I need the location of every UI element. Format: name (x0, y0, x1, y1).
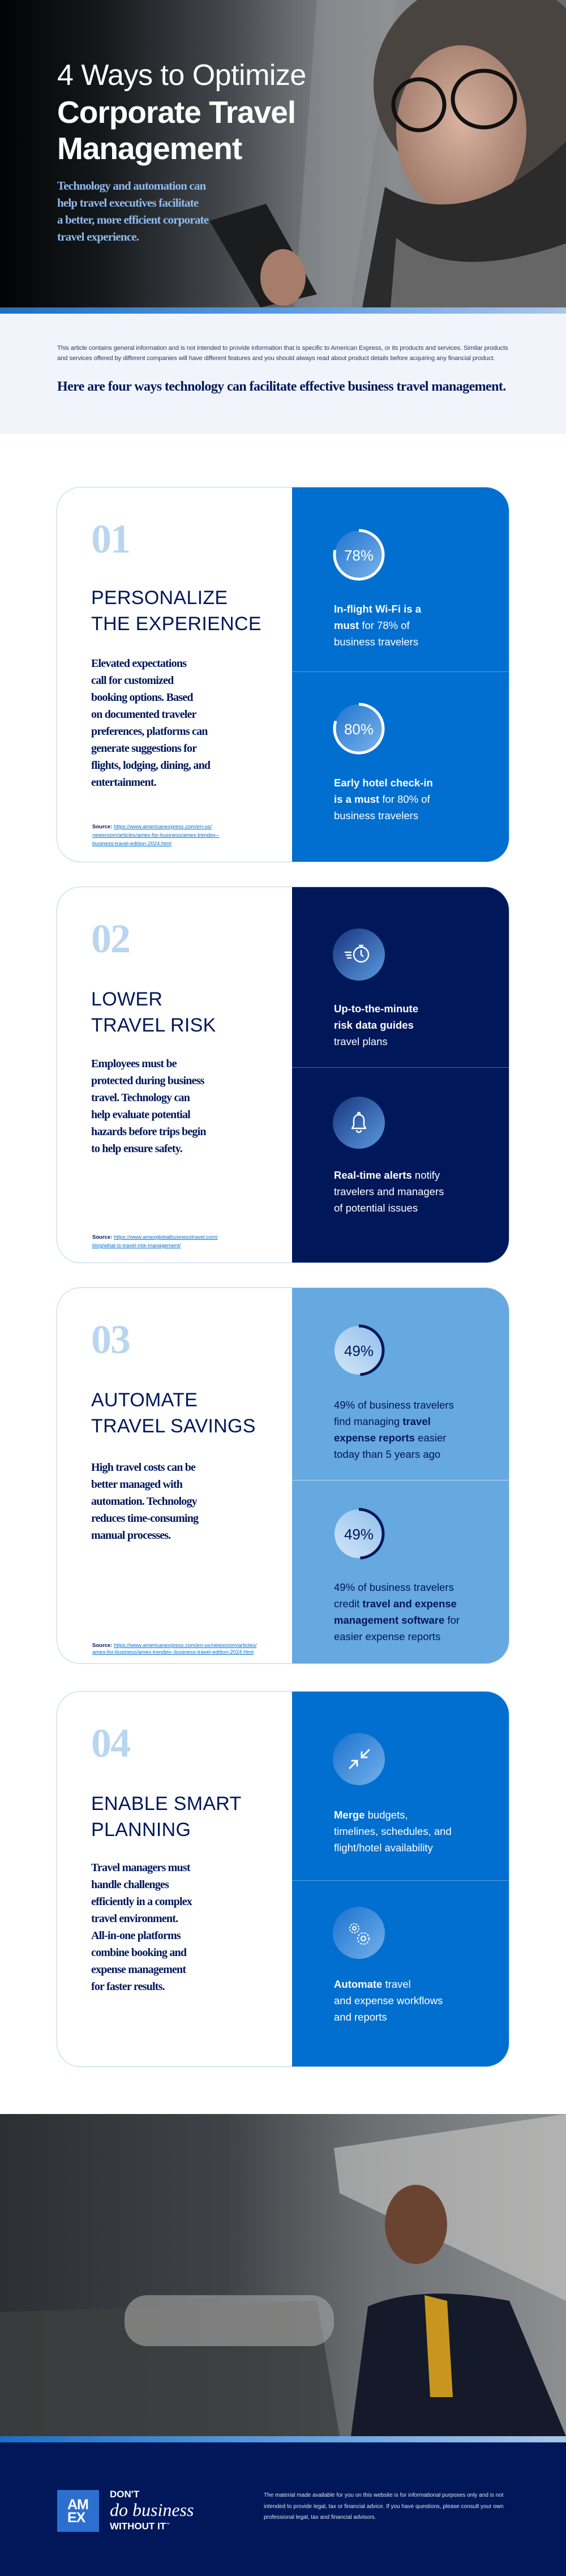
heading: TRAVEL RISK (91, 1015, 216, 1036)
panel: savings (292, 1288, 510, 1663)
ring: 78%: 78% (344, 547, 374, 564)
photo: woman illustration (209, 0, 566, 307)
stat text: Early hotel check-in (334, 777, 433, 789)
title: Management (57, 131, 242, 166)
ring: 49% (335, 1508, 385, 1559)
stat text (334, 1978, 443, 2023)
panel: stats (292, 487, 510, 862)
panel: planning (292, 1692, 510, 2066)
ring: 80%: 80% (344, 721, 374, 738)
heading: LOWER (91, 989, 162, 1010)
subtitle: travel experience. (57, 230, 139, 243)
stat text: find managing travel (334, 1415, 431, 1427)
body text (91, 657, 211, 789)
body text: to help ensure safety. (91, 1142, 182, 1155)
footer (0, 2442, 566, 2576)
body text: handle challenges (91, 1878, 169, 1891)
ring: 49%: 49% (344, 1526, 374, 1543)
body text: manual processes. (91, 1529, 170, 1542)
source: business-travel-edition-2024.html (92, 841, 171, 847)
stat text: must for 78% of (334, 619, 410, 631)
footer disclaimer: The material made available for you on this website is for informational purposes only and is not intended to provide legal, tax or financial advice. If you have questions, please consult your own professional legal, tax and financial advisors. (264, 2492, 504, 2521)
stat text: credit travel and expense (334, 1598, 457, 1610)
number: 02 (91, 916, 130, 961)
stat text: Merge budgets, (334, 1809, 408, 1821)
heading (91, 587, 261, 635)
stat text: 49% of business travelers (334, 1581, 454, 1593)
stat text: easier expense reports (334, 1631, 440, 1642)
card 1 (57, 487, 509, 862)
body text: preferences, platforms can (91, 725, 208, 738)
ring: 49% (335, 1325, 385, 1376)
intro heading: Here are four ways technology can facilitate effective business travel management. (57, 379, 506, 394)
body text: Employees must be (91, 1058, 177, 1070)
icon: stopwatch (333, 928, 385, 981)
source (92, 1234, 218, 1249)
subtitle: a better, more efficient corporate (57, 213, 208, 226)
disclaimer: and services offered by different companies will have different features and you should always read about product details before acquiring any financial product. (57, 355, 495, 362)
heading: TRAVEL SAVINGS (91, 1415, 256, 1437)
source: Source: https://www.americanexpress.com/en-us/newsroom/articles/ (92, 1642, 256, 1649)
heading: PLANNING (91, 1819, 191, 1841)
body text: call for customized (91, 674, 174, 687)
stat text: timelines, schedules, and (334, 1825, 452, 1837)
stat text: and reports (334, 2011, 387, 2023)
source (92, 824, 220, 847)
stat text (334, 1809, 452, 1854)
body text: on documented traveler (91, 708, 196, 721)
stat text: flight/hotel availability (334, 1842, 433, 1854)
disclaimer: This article contains general information and is not intended to provide information that is specific to American Express, or its products and services. Similar products (57, 345, 508, 352)
body text: better managed with (91, 1478, 182, 1491)
card 2 (57, 887, 509, 1263)
panel: risk (292, 887, 510, 1263)
body text: for faster results. (91, 1980, 165, 1993)
stat text: In-flight Wi-Fi is a (334, 603, 421, 615)
header photo (0, 0, 566, 307)
heading: THE EXPERIENCE (91, 613, 261, 635)
source (92, 1642, 257, 1655)
heading (91, 1793, 242, 1841)
stat text: expense reports easier (334, 1432, 446, 1444)
body text: automation. Technology (91, 1495, 197, 1508)
source: Source: https://www.americanexpress.com/en-us/ (92, 824, 212, 830)
stat text: Up-to-the-minute (334, 1003, 418, 1015)
number: 04 (91, 1721, 130, 1766)
stat text: is a must for 80% of (334, 793, 430, 805)
stat text: business travelers (334, 810, 418, 821)
subtitle: help travel executives facilitate (57, 196, 198, 209)
card 3 (57, 1287, 509, 1664)
body text: Elevated expectations (91, 657, 186, 670)
body text (91, 1058, 206, 1155)
stat text: Real-time alerts notify (334, 1169, 440, 1181)
title (57, 59, 306, 166)
intro section (0, 314, 566, 434)
body text: combine booking and (91, 1946, 186, 1959)
source: newsroom/articles/amex-for-business/amex-trendex-- (92, 832, 219, 838)
body text: expense management (91, 1963, 186, 1976)
stat text: travelers and managers (334, 1186, 444, 1197)
logo: amex (57, 2490, 99, 2532)
stat text (334, 1581, 460, 1642)
stat text: travel plans (334, 1035, 388, 1047)
stat text: today than 5 years ago (334, 1448, 440, 1460)
subtitle (57, 179, 209, 243)
icon: merge arrows (333, 1733, 385, 1785)
source: blog/what-is-travel-risk-management/ (92, 1243, 181, 1249)
heading: ENABLE SMART (91, 1793, 242, 1815)
body text (91, 1461, 199, 1542)
tagline: DON'T (110, 2489, 139, 2500)
stat text: 49% of business travelers (334, 1399, 454, 1411)
source: amex-for-business/amex-trendex--business-travel-edition-2024.html (92, 1649, 254, 1655)
stat text: Automate travel (334, 1978, 411, 1990)
number: 01 (91, 516, 130, 562)
body text: protected during business (91, 1075, 204, 1087)
card 4 (57, 1691, 509, 2067)
icon: gears (333, 1907, 385, 1959)
ring: 78% (333, 529, 385, 581)
logo: amex: AM (67, 2497, 88, 2513)
heading (91, 1389, 256, 1437)
body text: Travel managers must (91, 1862, 190, 1874)
stat text: risk data guides (334, 1019, 414, 1031)
tagline: WITHOUT IT™ (110, 2521, 170, 2532)
stat text (334, 1169, 444, 1214)
body text: travel. Technology can (91, 1092, 190, 1104)
tagline: do business (110, 2500, 194, 2520)
ring: 49%: 49% (344, 1342, 374, 1359)
stat text (334, 603, 421, 648)
title: 4 Ways to Optimize (57, 59, 306, 92)
body text: generate suggestions for (91, 742, 196, 755)
body text: All-in-one platforms (91, 1929, 181, 1942)
body text: help evaluate potential (91, 1109, 190, 1121)
title: Corporate Travel (57, 95, 295, 130)
heading: PERSONALIZE (91, 587, 228, 609)
stat text: management software for (334, 1614, 460, 1626)
logo: amex: EX (67, 2510, 85, 2526)
body text: efficiently in a complex (91, 1895, 192, 1908)
icon: bell (333, 1097, 385, 1149)
stat text: of potential issues (334, 1202, 418, 1214)
subtitle: Technology and automation can (57, 179, 206, 192)
stat text: and expense workflows (334, 1995, 443, 2006)
bottom photo (0, 2114, 566, 2436)
body text: entertainment. (91, 776, 156, 789)
body text: reduces time-consuming (91, 1512, 198, 1525)
body text: flights, lodging, dining, and (91, 759, 210, 772)
heading: AUTOMATE (91, 1389, 198, 1411)
source: Source: https://www.amexglobalbusinesstravel.com/ (92, 1234, 218, 1240)
body text (91, 1862, 192, 1993)
disclaimer (57, 345, 508, 362)
heading (91, 989, 216, 1036)
tagline (110, 2489, 194, 2532)
body text: travel environment. (91, 1912, 178, 1925)
ring: 80% (333, 703, 385, 754)
body text: booking options. Based (91, 691, 193, 704)
stat text (334, 1399, 454, 1460)
body text: hazards before trips begin (91, 1126, 206, 1138)
stat text (334, 1003, 418, 1047)
stat text (334, 777, 433, 821)
body text: High travel costs can be (91, 1461, 195, 1474)
stat text: business travelers (334, 636, 418, 648)
number: 03 (91, 1317, 130, 1362)
